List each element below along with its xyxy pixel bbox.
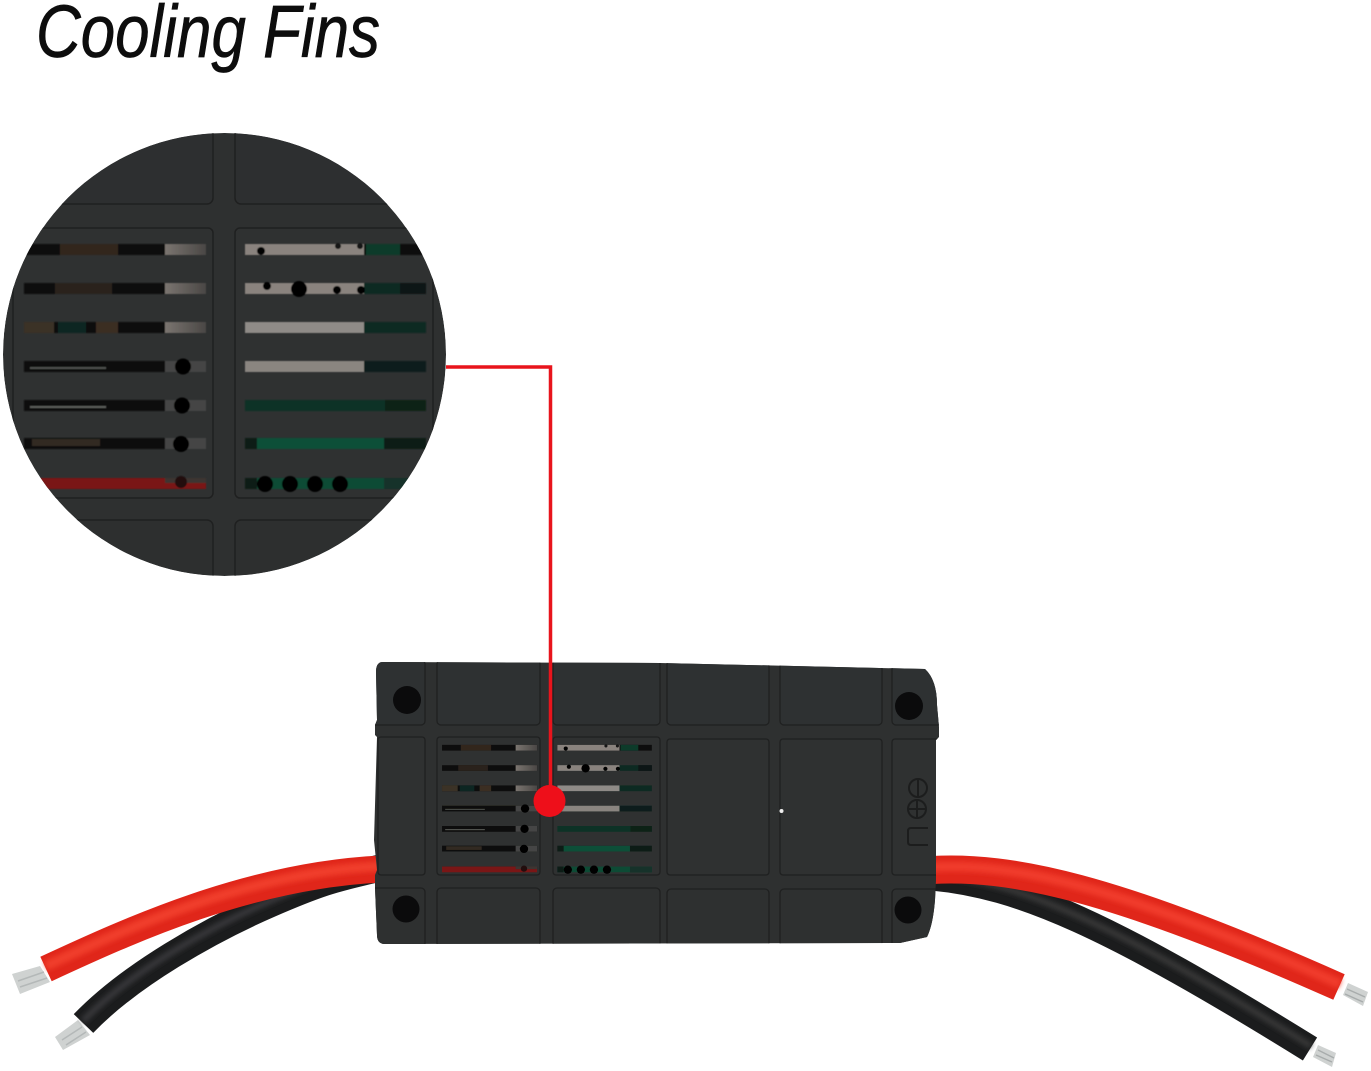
top row panels xyxy=(370,660,942,725)
polarity marks xyxy=(908,779,928,845)
right black wire xyxy=(932,874,1336,1067)
device body xyxy=(370,655,945,950)
bottom row panels xyxy=(375,888,936,944)
left red wire xyxy=(12,866,382,994)
speck xyxy=(780,809,784,813)
red callout dot xyxy=(534,785,566,817)
mounting holes xyxy=(392,686,923,924)
red callout line xyxy=(446,367,550,801)
right red wire xyxy=(932,867,1368,1006)
left black wire xyxy=(55,865,380,1050)
middle row panels xyxy=(378,737,942,875)
device vent slots xyxy=(442,744,652,874)
zoomed detail circle: cooling fins xyxy=(3,133,446,576)
